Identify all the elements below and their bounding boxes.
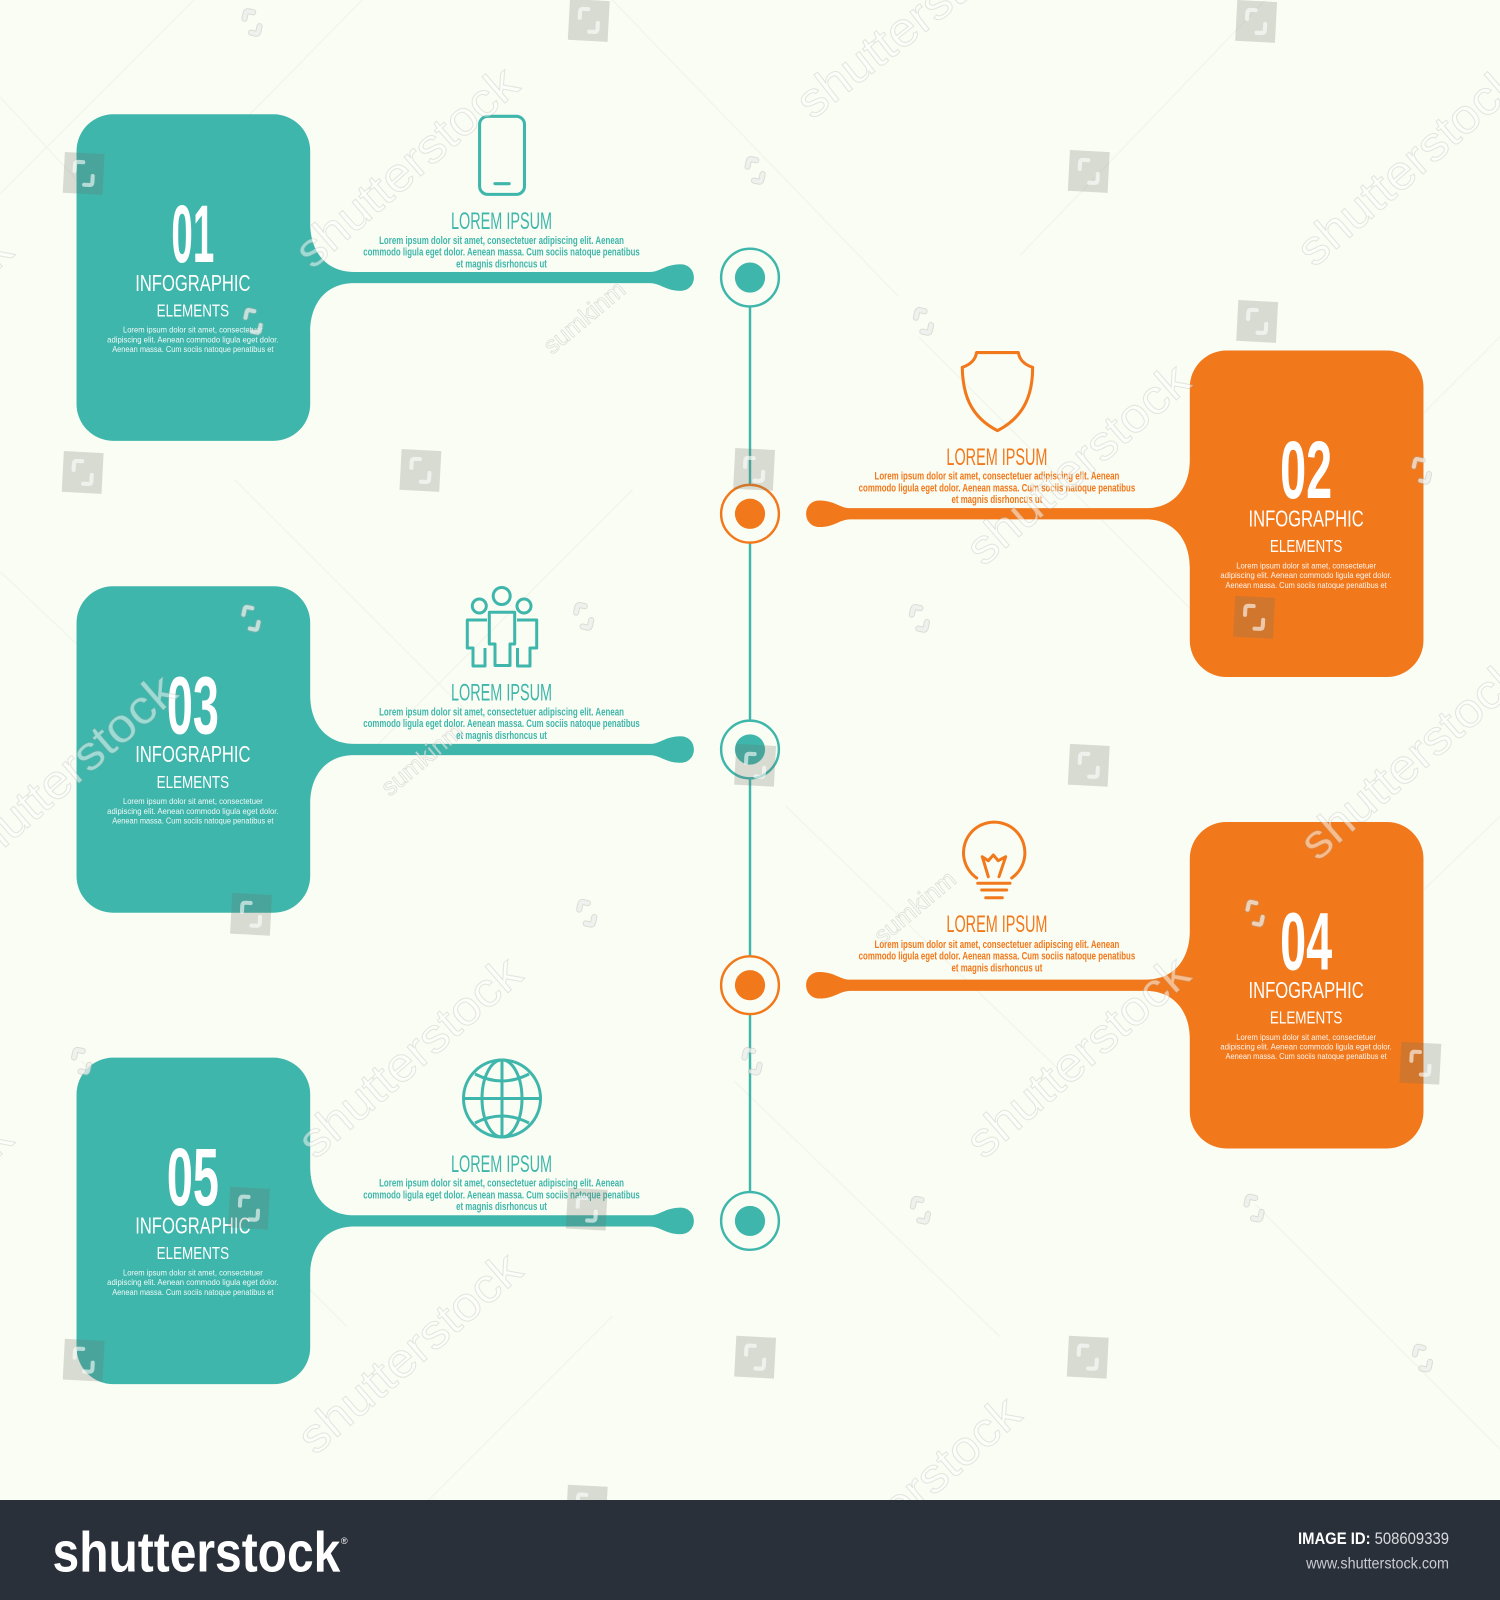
timeline node 04: [721, 956, 779, 1014]
card subheading: ELEMENTS: [157, 300, 229, 320]
label text: [363, 706, 640, 742]
card shape with connector: [77, 114, 694, 441]
card heading: INFOGRAPHIC: [135, 270, 251, 296]
label text: commodo ligula eget dolor. Aenean massa. Cum sociis natoque penatibus: [363, 247, 640, 259]
card heading: INFOGRAPHIC: [135, 1213, 251, 1239]
stock watermark overlay: sumkinm: [539, 276, 631, 360]
card text: [1220, 1033, 1392, 1061]
label heading: LOREM IPSUM: [451, 208, 552, 235]
label text: [859, 471, 1135, 506]
label text: commodo ligula eget dolor. Aenean massa. Cum sociis natoque penatibus: [363, 718, 640, 730]
label heading: LOREM IPSUM: [946, 444, 1047, 471]
label text: Lorem ipsum dolor sit amet, consectetuer adipiscing elit. Aenean: [874, 939, 1119, 951]
website: www.shutterstock.com: [1305, 1555, 1449, 1572]
stock watermark overlay: shutterstock: [285, 56, 530, 279]
label text: commodo ligula eget dolor. Aenean massa. Cum sociis natoque penatibus: [859, 482, 1135, 494]
label text: et magnis disrhoncus ut: [952, 962, 1043, 974]
icon: light bulb: [964, 822, 1025, 898]
card text: [1220, 561, 1392, 590]
stock watermark overlay: shutterstock: [956, 353, 1201, 576]
label text: [363, 235, 640, 270]
icon: globe: [464, 1060, 540, 1137]
panel: step 05: [77, 1058, 779, 1384]
panel: step 01: [77, 114, 779, 441]
timeline vertical line: [749, 278, 751, 1220]
panel: step 01: 01: [171, 189, 214, 280]
footer logo: shutterstock: [53, 1520, 341, 1583]
label text: et magnis disrhoncus ut: [952, 494, 1043, 506]
label text: Lorem ipsum dolor sit amet, consectetuer adipiscing elit. Aenean: [874, 471, 1119, 483]
label text: Lorem ipsum dolor sit amet, consectetuer adipiscing elit. Aenean: [379, 1178, 624, 1190]
number 05: 05: [167, 1132, 219, 1223]
card subheading: ELEMENTS: [157, 772, 229, 792]
card text: adipiscing elit. Aenean commodo ligula eget dolor.: [107, 1278, 279, 1287]
card shape with connector: [77, 586, 694, 913]
image id: IMAGE ID: 508609339: [1298, 1529, 1449, 1548]
card text: [107, 1269, 279, 1297]
panel: step 02: [721, 351, 1423, 677]
card heading: INFOGRAPHIC: [1248, 506, 1364, 532]
label text: commodo ligula eget dolor. Aenean massa. Cum sociis natoque penatibus: [859, 951, 1135, 963]
label heading: LOREM IPSUM: [451, 1151, 552, 1178]
card shape with connector: [806, 822, 1423, 1148]
card subheading: ELEMENTS: [1270, 536, 1342, 556]
card text: Aenean massa. Cum sociis natoque penatibus et: [1226, 1052, 1387, 1061]
footer logo: ®: [341, 1536, 348, 1546]
card text: [107, 797, 279, 825]
label text: et magnis disrhoncus ut: [456, 730, 547, 742]
panel: step 04: [721, 822, 1423, 1148]
timeline node 01: [721, 249, 779, 306]
stock watermark overlay: sumkinm: [869, 866, 962, 949]
card text: Aenean massa. Cum sociis natoque penatibus et: [112, 1288, 274, 1297]
card subheading: ELEMENTS: [157, 1243, 229, 1263]
card subheading: ELEMENTS: [1270, 1007, 1342, 1027]
label text: Lorem ipsum dolor sit amet, consectetuer adipiscing elit. Aenean: [379, 235, 624, 247]
number 02: 02: [1280, 425, 1332, 516]
stock watermark overlay: sumkinm: [376, 718, 469, 802]
stock watermark overlay: shutterstock: [288, 946, 533, 1169]
label text: commodo ligula eget dolor. Aenean massa. Cum sociis natoque penatibus: [363, 1189, 640, 1201]
label text: [859, 939, 1135, 974]
card shape with connector: [806, 351, 1423, 677]
card text: Aenean massa. Cum sociis natoque penatibus et: [112, 345, 274, 354]
stock watermark overlay: shutterstock: [956, 946, 1201, 1169]
label text: Lorem ipsum dolor sit amet, consectetuer adipiscing elit. Aenean: [379, 706, 624, 718]
number 03: 03: [167, 661, 219, 752]
stock watermark overlay: shutterstock: [288, 1242, 533, 1464]
card text: Lorem ipsum dolor sit amet, consectetuer: [123, 326, 263, 335]
card text: Lorem ipsum dolor sit amet, consectetuer: [123, 1269, 263, 1278]
card shape with connector: [77, 1058, 694, 1384]
label text: et magnis disrhoncus ut: [456, 258, 547, 270]
card text: Aenean massa. Cum sociis natoque penatibus et: [112, 816, 274, 825]
card text: adipiscing elit. Aenean commodo ligula eget dolor.: [1220, 1042, 1392, 1051]
panel: step 03: [77, 586, 779, 913]
card text: adipiscing elit. Aenean commodo ligula eget dolor.: [107, 335, 279, 344]
card heading: INFOGRAPHIC: [135, 741, 251, 767]
timeline node 05: [721, 1192, 779, 1250]
label heading: LOREM IPSUM: [946, 911, 1047, 938]
number 04: 04: [1280, 896, 1332, 987]
timeline node 02: [721, 485, 779, 543]
icon: shield: [962, 353, 1033, 431]
label heading: LOREM IPSUM: [451, 680, 552, 707]
label text: et magnis disrhoncus ut: [456, 1201, 547, 1213]
icon: group of people: [467, 588, 537, 666]
card heading: INFOGRAPHIC: [1248, 977, 1364, 1003]
label text: [363, 1178, 640, 1213]
card text: [107, 326, 279, 354]
card text: adipiscing elit. Aenean commodo ligula eget dolor.: [107, 807, 279, 816]
icon: smartphone: [480, 116, 524, 194]
card text: Lorem ipsum dolor sit amet, consectetuer: [123, 797, 263, 806]
card text: adipiscing elit. Aenean commodo ligula eget dolor.: [1220, 571, 1392, 580]
card text: Aenean massa. Cum sociis natoque penatibus et: [1226, 581, 1387, 590]
card text: Lorem ipsum dolor sit amet, consectetuer: [1236, 561, 1376, 570]
timeline node 03: [721, 721, 779, 778]
card text: Lorem ipsum dolor sit amet, consectetuer: [1236, 1033, 1376, 1042]
footer bar: [0, 1500, 1500, 1600]
